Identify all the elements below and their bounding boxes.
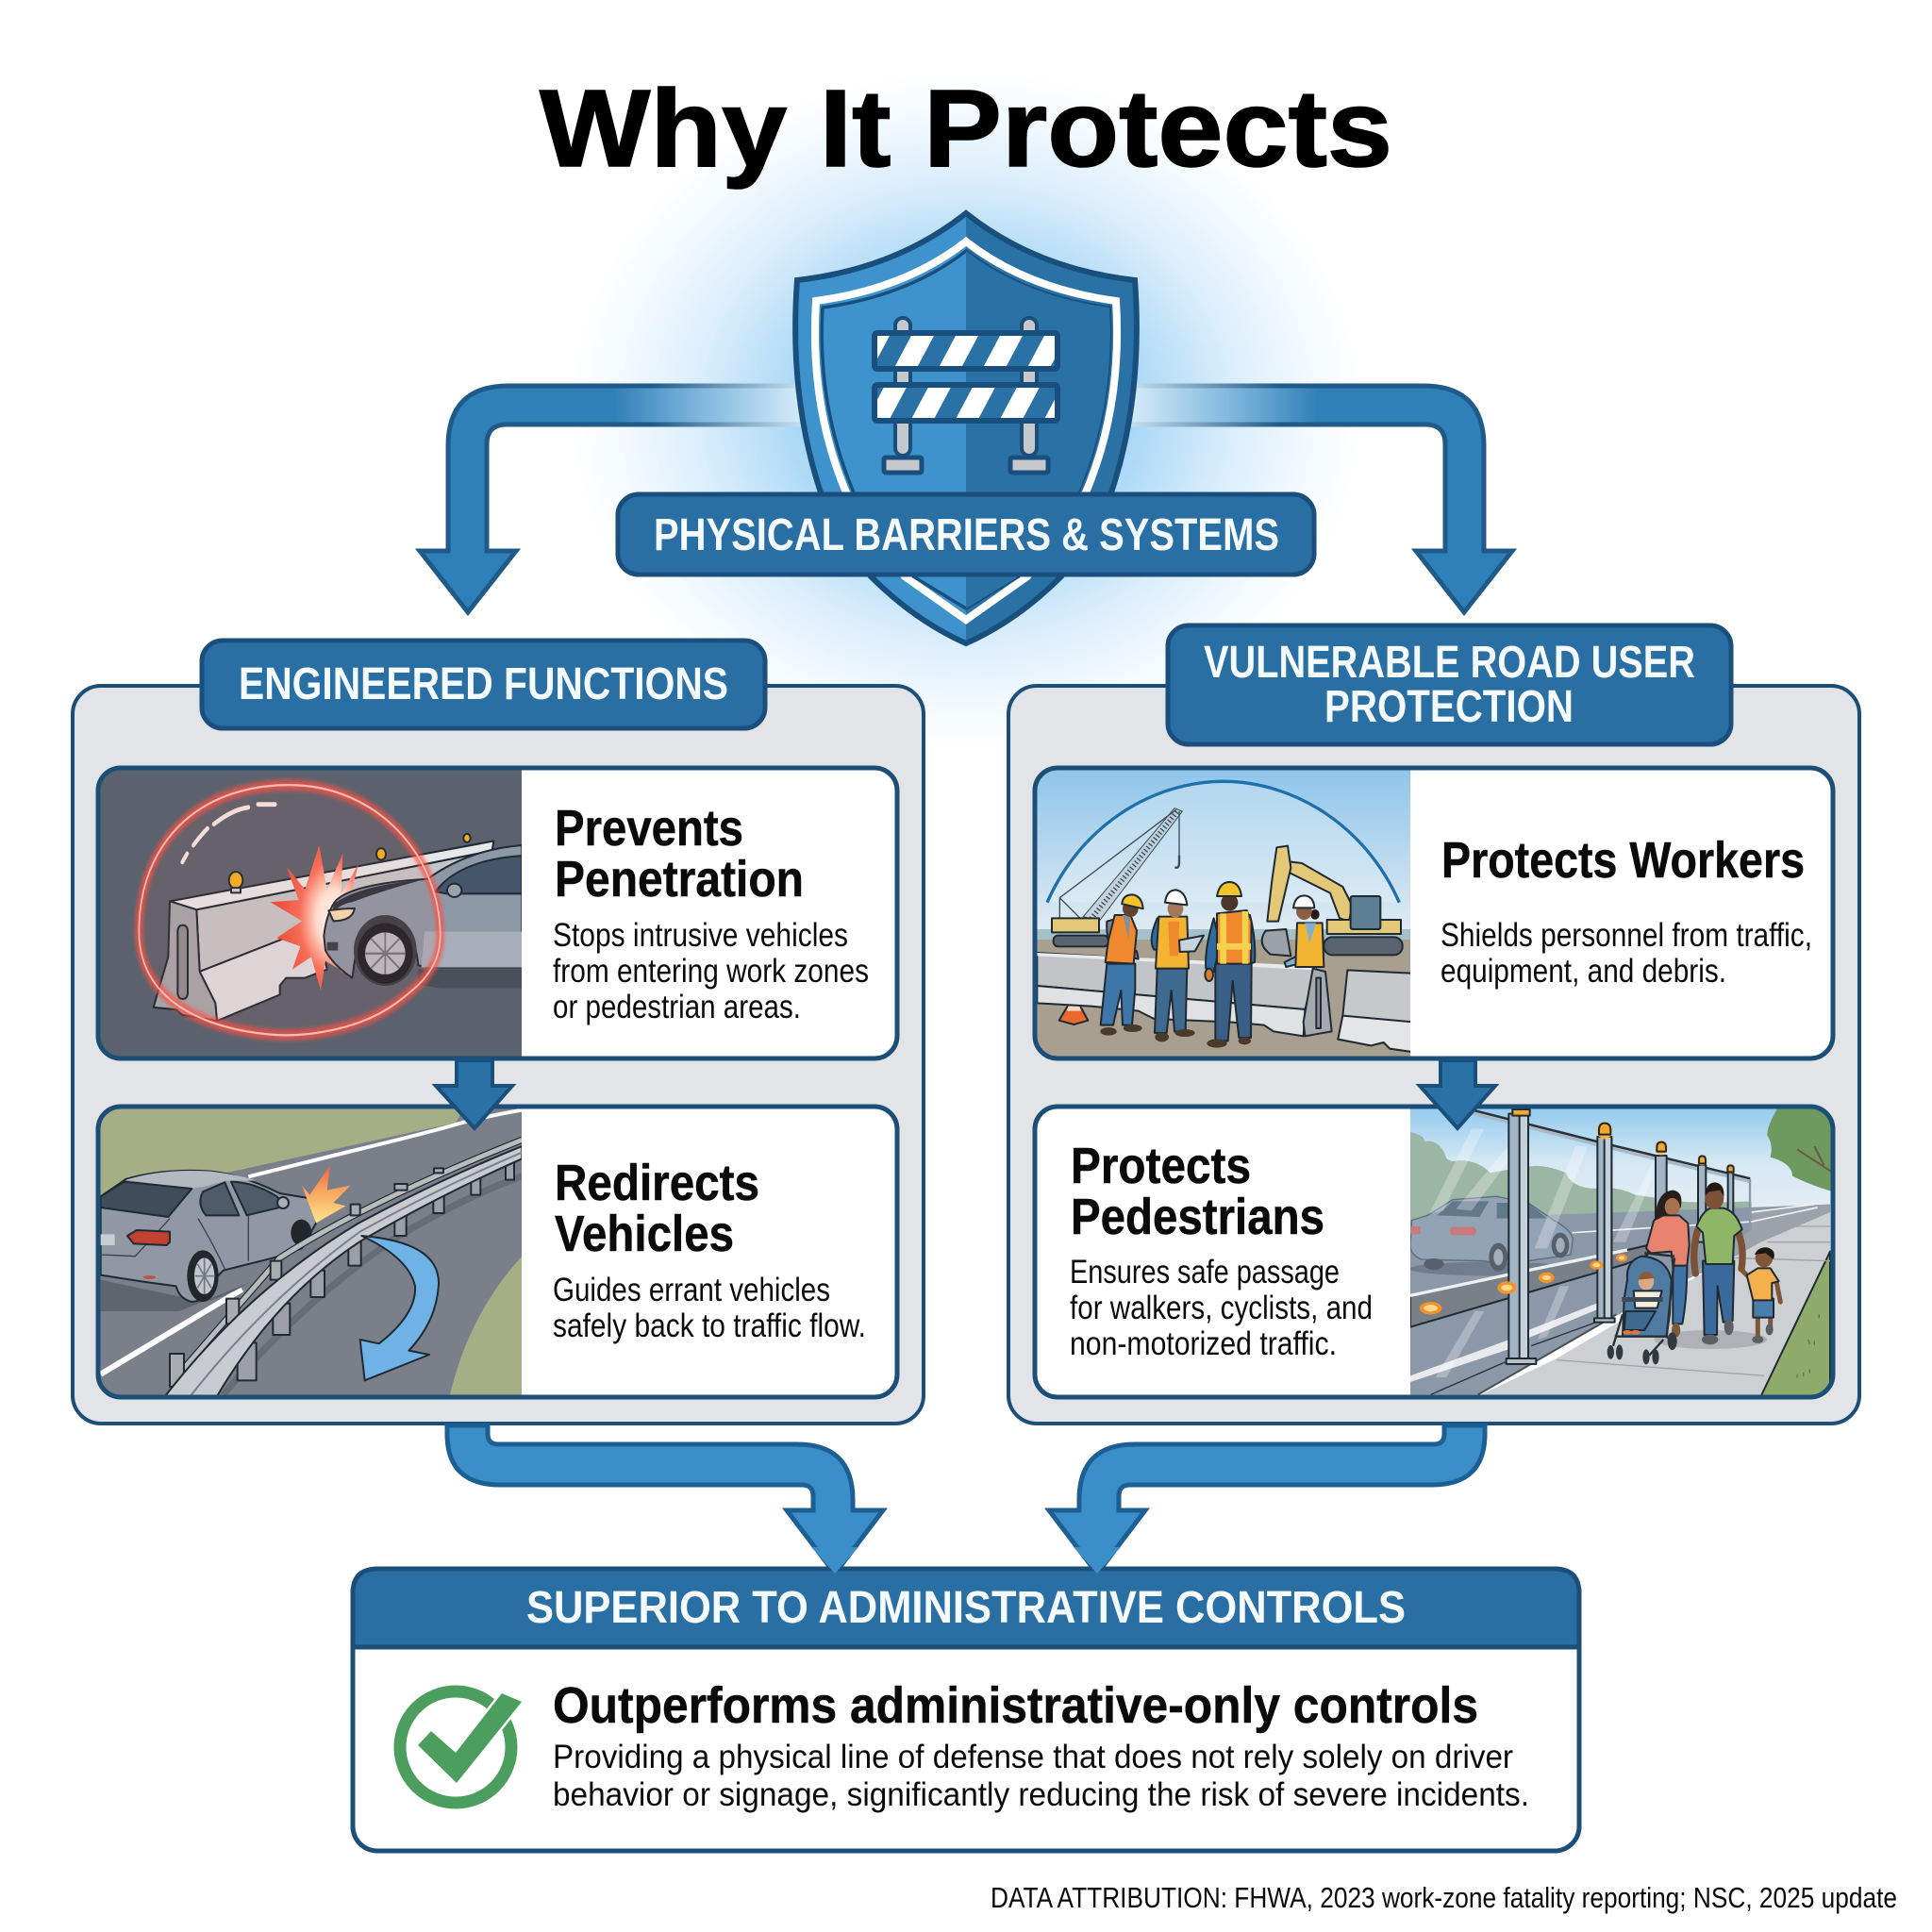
text: redirects vehicles: Redirects: [555, 1155, 759, 1211]
card: protects pedestrians: [1035, 1104, 1838, 1397]
barricade: [874, 318, 1058, 473]
banner: physical barriers and systems: [618, 494, 1314, 575]
impact burst: [271, 845, 358, 991]
father: [1694, 1182, 1742, 1344]
text: protects workers: equipment, and debris.: [1441, 953, 1726, 990]
stroller: [1607, 1253, 1677, 1364]
worker 1: [1100, 894, 1143, 1036]
car: [101, 1171, 316, 1302]
text: redirects vehicles: Guides errant vehicles: [553, 1272, 830, 1308]
car: [324, 845, 522, 986]
arrow: engineered functions to conclusion: [447, 1425, 883, 1574]
excavator: [1262, 846, 1403, 956]
icon: green check mark: [400, 1691, 522, 1803]
worker 2: [1152, 890, 1204, 1041]
panel: vulnerable road user protection: [1008, 625, 1859, 1424]
panel: superior to administrative controls: [353, 1547, 1579, 1851]
tree: [1767, 1107, 1833, 1191]
text: prevents penetration: Prevents: [555, 800, 743, 857]
title: Why It Protects: [540, 67, 1392, 190]
arrow: road user protection to conclusion: [1049, 1425, 1485, 1574]
text: prevents penetration: Stops intrusive vehicles: [553, 917, 848, 954]
text: prevents penetration: from entering work zones: [553, 953, 869, 990]
text: protects pedestrians: Ensures safe passage: [1070, 1254, 1340, 1291]
icon: shield with road barricade: [795, 213, 1137, 643]
illustration: car hitting concrete barrier in red dome: [100, 770, 522, 1057]
arrow: between right cards: [1420, 1060, 1495, 1128]
illustration: family behind glass barrier: [1408, 1104, 1838, 1396]
text: protects workers: [1441, 832, 1812, 990]
child: [1740, 1247, 1780, 1343]
red dome: [139, 785, 441, 1035]
mother: [1646, 1191, 1690, 1337]
panel: engineered functions: [73, 641, 924, 1424]
text: outperforms administrative-only controls: behavior or signage, significantly reducing the risk of severe incidents.: [553, 1776, 1529, 1813]
card: redirects vehicles: [85, 1094, 897, 1408]
text: protects pedestrians: non-motorized traffic.: [1070, 1325, 1337, 1362]
heading: vulnerable road user protection: PROTECTION: [1324, 682, 1574, 732]
spark: [302, 1165, 351, 1224]
text: protects pedestrians: [1070, 1138, 1373, 1362]
heading: engineered functions: [202, 641, 765, 728]
text: protects pedestrians: for walkers, cyclists, and: [1070, 1290, 1373, 1326]
glass streaks: [1429, 1129, 1653, 1377]
cone: [1058, 1006, 1089, 1025]
header bar: [353, 1569, 1579, 1647]
redirect arrow: [360, 1236, 439, 1380]
header bar: SUPERIOR TO ADMINISTRATIVE CONTROLS: [526, 1583, 1406, 1633]
car behind glass: [1408, 1196, 1573, 1275]
heading: engineered functions: ENGINEERED FUNCTIONS: [239, 659, 728, 709]
text: redirects vehicles: safely back to traffic flow.: [553, 1307, 866, 1344]
worker 4: [1285, 895, 1324, 967]
worker 3: [1205, 882, 1255, 1048]
text: redirects vehicles: [553, 1155, 866, 1344]
text: prevents penetration: or pedestrian areas.: [553, 989, 801, 1025]
text: prevents penetration: [553, 800, 869, 1025]
arrow: barriers to engineered functions: [420, 386, 802, 612]
illustration: workers at barrier under blue dome: [1028, 764, 1412, 1065]
text: protects pedestrians: Pedestrians: [1071, 1189, 1324, 1245]
arrow: barriers to road user protection: [1130, 386, 1512, 612]
posts and rails: [1410, 1111, 1750, 1394]
crane: [1052, 808, 1182, 946]
heading: vulnerable road user protection: [1168, 625, 1731, 744]
heading: vulnerable road user protection: VULNERABLE ROAD USER: [1204, 638, 1695, 688]
amber lights: [1420, 1109, 1735, 1314]
text: outperforms administrative-only controls: Providing a physical line of defense that does not rely solely on driver: [553, 1739, 1513, 1775]
card: prevents penetration: [85, 755, 897, 1074]
back rail and posts: [170, 1140, 522, 1387]
text: prevents penetration: Penetration: [555, 851, 804, 908]
sidewalk and grass: [1478, 1212, 1830, 1396]
text: outperforms administrative-only controls: [553, 1677, 1529, 1813]
card: protects workers: [1028, 764, 1833, 1065]
illustration: car deflected by guardrail: [100, 1109, 522, 1394]
text: protects workers: Shields personnel from traffic,: [1441, 917, 1812, 954]
family: [1607, 1182, 1780, 1364]
text: outperforms administrative-only controls: Outperforms administrative-only controls: [553, 1677, 1478, 1734]
arrow tips over header: [811, 1547, 1121, 1574]
text: redirects vehicles: Vehicles: [555, 1206, 734, 1262]
front posts: [238, 1162, 514, 1380]
arrow: between left cards: [436, 1060, 512, 1128]
banner: physical barriers and systems: PHYSICAL BARRIERS & SYSTEMS: [654, 510, 1279, 560]
text: protects workers: Protects Workers: [1441, 832, 1805, 889]
barriers: [1037, 953, 1412, 1052]
main rail: [165, 1146, 522, 1396]
barrier: [154, 834, 493, 1021]
text: protects pedestrians: Protects: [1071, 1138, 1251, 1194]
